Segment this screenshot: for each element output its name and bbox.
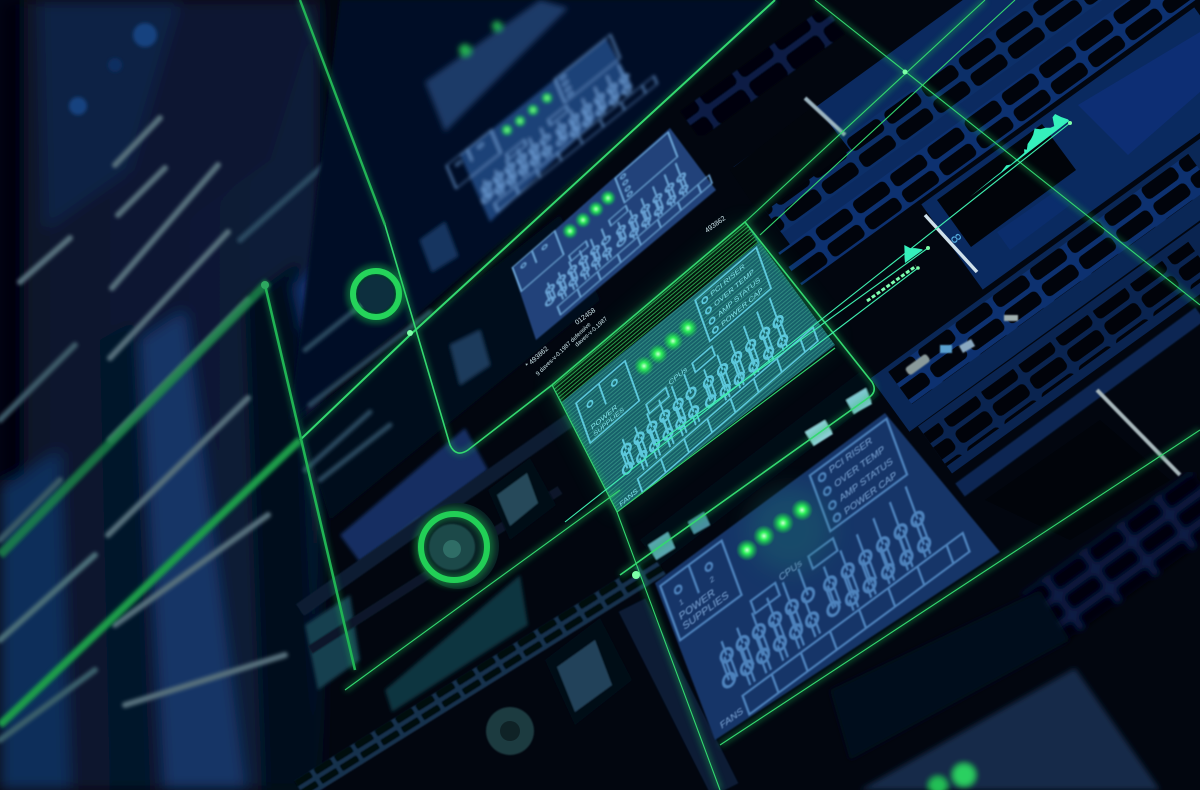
- panel: bottom blurred unit: [830, 590, 1160, 790]
- junction nodes: [261, 70, 1072, 579]
- band base fourth: [935, 244, 1200, 450]
- label: bay number: 8: [948, 230, 965, 246]
- green overlay lines: [265, 0, 1200, 790]
- handle: white: [925, 215, 977, 272]
- bokeh highlights top left: [69, 23, 157, 115]
- wide green beam lower left: [0, 440, 300, 725]
- handle: upper: [805, 98, 845, 135]
- icon: green ring: [352, 270, 400, 318]
- left blurred light streaks: [0, 118, 330, 740]
- upper middle dark rack: [290, 0, 780, 712]
- lower black bay: [985, 420, 1170, 540]
- panel labels: [582, 255, 790, 509]
- handle: lower: [1097, 390, 1180, 475]
- drive bay blue bar: [997, 190, 1070, 250]
- panel labels: FANS: [719, 705, 745, 732]
- status LEDs: [736, 488, 832, 572]
- panel labels: PCI RISER: [828, 436, 874, 476]
- lower drive band: [960, 314, 1200, 490]
- light tabs: [905, 315, 1018, 376]
- hatched top band: [552, 222, 758, 402]
- data histogram lower: [896, 238, 923, 263]
- panel labels: AMP STATUS: [717, 275, 761, 319]
- rack rails lower left: [300, 420, 725, 790]
- slot row: blurred lower: [1040, 497, 1200, 620]
- drive bay black opening: [937, 124, 1076, 247]
- icon: front plate squares: [488, 458, 632, 725]
- black bay top: [730, 105, 850, 215]
- HUD text readouts: 012458: [574, 307, 597, 327]
- ejector tabs between panels: [640, 372, 880, 565]
- band base lower: [890, 165, 1200, 405]
- data dashes lower: [867, 266, 916, 301]
- data histogram upper: [961, 109, 1069, 197]
- panel labels: 1: [678, 597, 685, 608]
- panel: bottom server label: [655, 399, 1000, 740]
- panel labels: POWER: [590, 403, 618, 432]
- slot row: A: [770, 0, 1100, 217]
- panel circuitry: [660, 399, 970, 739]
- HUD text readouts: 493862: [704, 215, 727, 235]
- panel labels: OVER TEMP: [833, 444, 887, 490]
- drive bay band: [952, 50, 1200, 247]
- panel fill: [552, 222, 835, 512]
- HUD text readouts: [525, 215, 727, 377]
- panel LEDs: [634, 318, 698, 376]
- panel labels: CPUs: [668, 365, 688, 387]
- panel labels: PCI RISER: [710, 262, 746, 298]
- panel: blurred top panel: [425, 0, 568, 132]
- panel labels: SUPPLIES: [593, 406, 625, 438]
- slot row: top: [690, 20, 835, 125]
- panel: highlighted holographic server label: [552, 222, 835, 515]
- panel labels: POWER CAP: [720, 286, 764, 328]
- panel: second server label: [446, 19, 657, 230]
- right server bays: [690, 0, 1200, 620]
- panel labels: POWER: [678, 587, 717, 623]
- panel glow: [552, 222, 835, 512]
- wide green beam left: [0, 282, 268, 555]
- middle rack rails: [305, 290, 430, 610]
- panel: third server label: [512, 116, 716, 340]
- panel labels: OVER TEMP: [713, 267, 755, 308]
- left blurred rack region: [0, 0, 415, 790]
- HUD text readouts: 9 daves-v-0.1987 defensive: [535, 321, 593, 377]
- panel circuitry: [576, 229, 818, 515]
- icon: green dial: [417, 503, 499, 589]
- panel labels: CPUs: [778, 558, 803, 584]
- slot row: third: [900, 170, 1200, 388]
- HUD text readouts: * 493862: [525, 345, 550, 369]
- blue drive block: [1078, 32, 1200, 155]
- band base upper: [770, 0, 1200, 217]
- slot row: B: [790, 0, 1200, 269]
- panel labels: POWER CAP: [843, 470, 899, 518]
- panel labels: FANS: [619, 486, 639, 509]
- icon: grey disc: [486, 707, 534, 755]
- panel labels: [668, 428, 935, 732]
- slot row: fourth: [935, 258, 1200, 450]
- panel labels: AMP STATUS: [838, 456, 895, 504]
- panel labels: SUPPLIES: [681, 589, 730, 633]
- panel labels: 2: [709, 574, 716, 585]
- HUD text readouts: daves-v-0.1987: [574, 316, 610, 348]
